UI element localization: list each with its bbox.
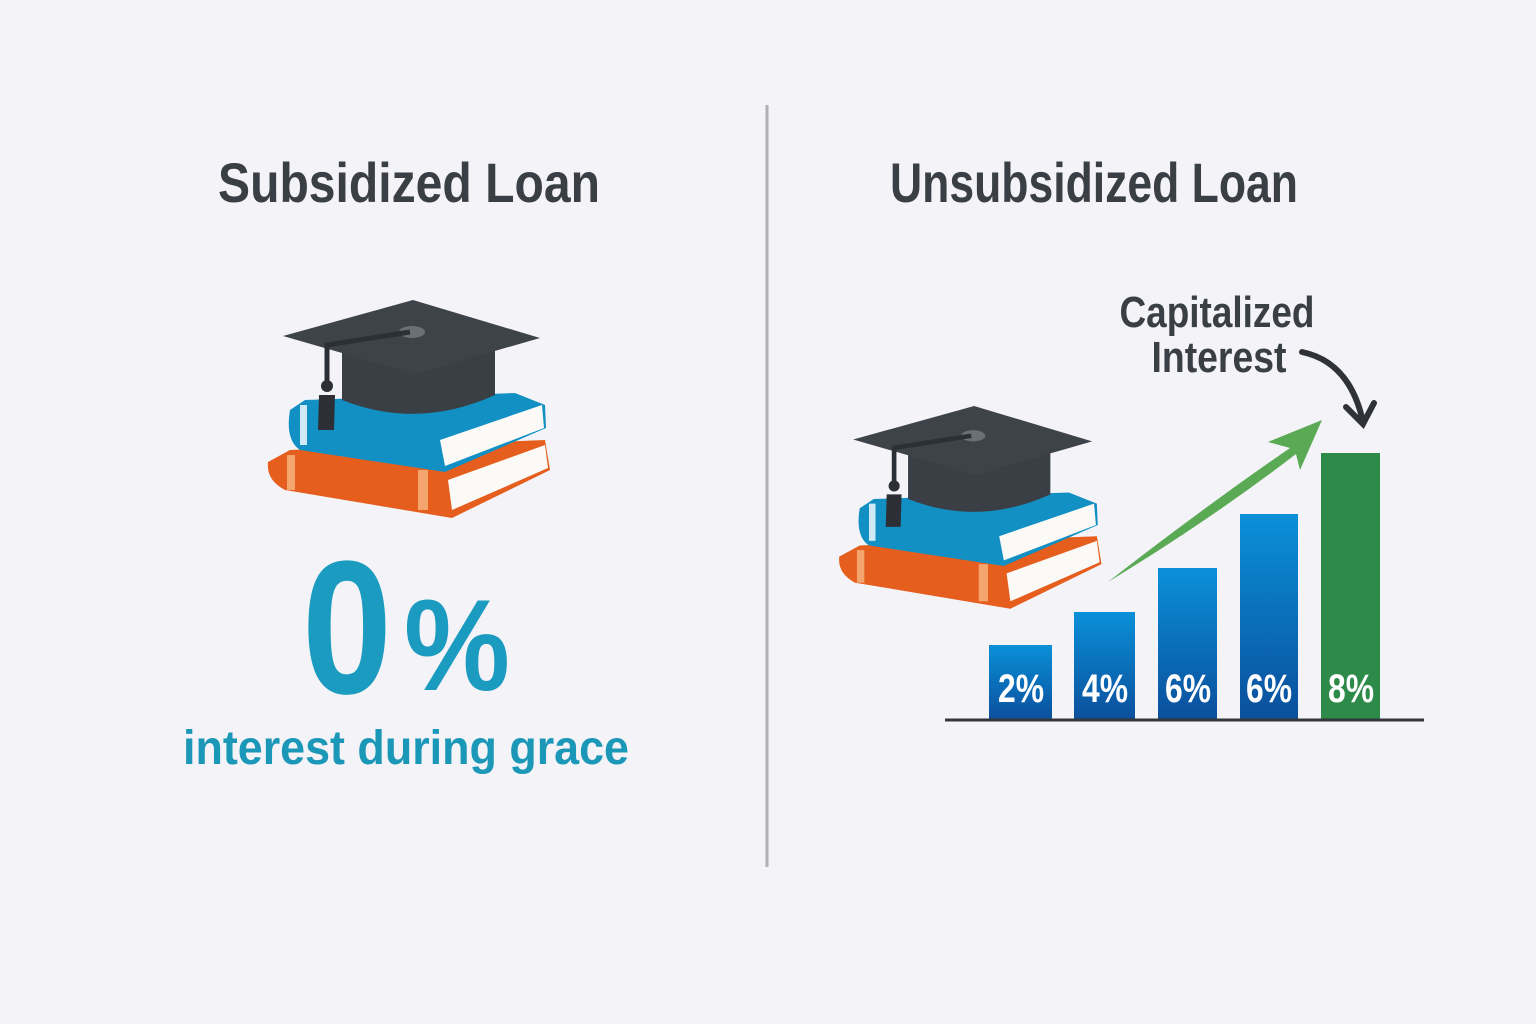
arrow: curved dark arrow — [1302, 352, 1374, 424]
bar chart — [945, 453, 1424, 720]
caption: interest during grace: interest during grace — [183, 722, 629, 775]
bar chart: 6% — [1246, 667, 1292, 711]
bar chart: 4% — [1082, 667, 1128, 711]
icon: grad cap and books (right) — [839, 406, 1102, 609]
title: subsidized loan: Subsidized Loan — [218, 151, 600, 214]
arrow: green growth arrow — [1108, 420, 1322, 582]
label: capitalized interest — [1120, 288, 1314, 382]
big number 0%: 0 — [302, 522, 392, 734]
icon: grad cap and books (left) — [268, 300, 550, 518]
big number 0%: % — [404, 572, 510, 718]
bar chart: 2% — [998, 667, 1044, 711]
label: capitalized interest: Interest — [1152, 333, 1287, 382]
bar chart: 6% — [1165, 667, 1211, 711]
title: unsubsidized loan: Unsubsidized Loan — [890, 151, 1298, 214]
bar chart: 8% — [1328, 667, 1374, 711]
label: capitalized interest: Capitalized — [1120, 288, 1314, 337]
big number 0% — [302, 522, 510, 734]
